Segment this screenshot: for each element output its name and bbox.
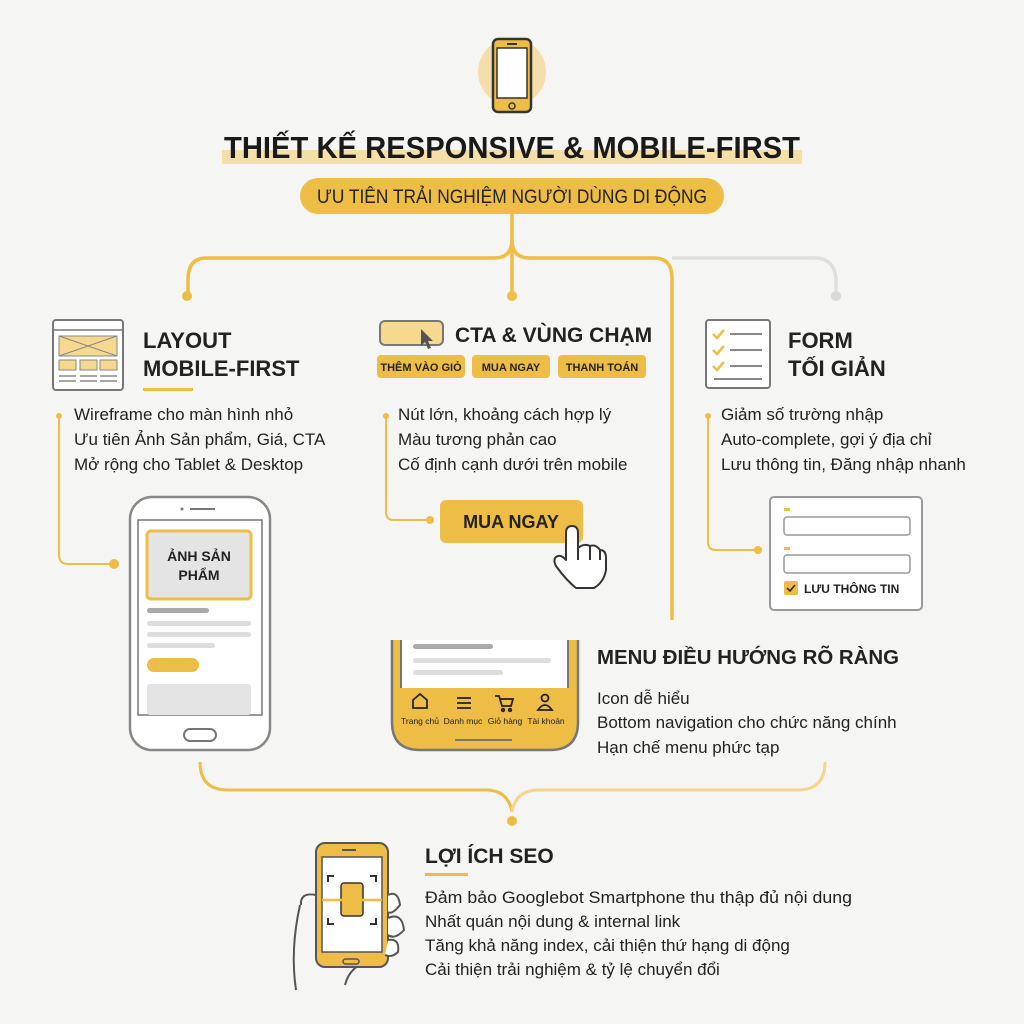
phone wireframe: PHẨM [178, 566, 220, 583]
form mockup: LƯU THÔNG TIN [804, 581, 899, 596]
panel: menu điều hướng: Icon dễ hiểu [597, 689, 690, 708]
bullets [74, 405, 326, 474]
icon: button with cursor [380, 321, 443, 349]
tags [377, 355, 646, 378]
panel: form tối giản: Lưu thông tin, Đăng nhập nhanh [721, 455, 966, 474]
connector tree top [182, 214, 841, 620]
panel: form tối giản [705, 320, 966, 610]
heading: LAYOUT [143, 328, 232, 353]
panel: form tối giản: Auto-complete, gợi ý địa chỉ [721, 430, 932, 449]
panel: layout mobile-first: MOBILE-FIRST [143, 356, 300, 381]
panel: lợi ích SEO: Tăng khả năng index, cải thiện thứ hạng di động [425, 936, 790, 955]
panel: menu điều hướng: Bottom navigation cho chức năng chính [597, 713, 897, 732]
subtitle pill: ƯU TIÊN TRẢI NGHIỆM NGƯỜI DÙNG DI ĐỘNG [317, 186, 707, 208]
phone bottom with nav: Danh mục [444, 716, 483, 726]
phone bottom with nav: Giỏ hàng [488, 716, 523, 726]
panel: lợi ích SEO [294, 843, 852, 990]
panel: menu điều hướng [392, 640, 899, 757]
bullets: Ưu tiên Ảnh Sản phẩm, Giá, CTA [74, 430, 326, 449]
phone wireframe: ẢNH SẢN [167, 548, 231, 564]
form mockup [770, 497, 922, 610]
phone wireframe [130, 497, 270, 750]
panel: CTA & vùng chạm: CTA & VÙNG CHẠM [455, 323, 652, 347]
panel: form tối giản: Giảm số trường nhập [721, 405, 883, 424]
bullets: Wireframe cho màn hình nhỏ [74, 405, 293, 424]
bullets: Nút lớn, khoảng cách hợp lý [398, 405, 612, 424]
icon: hand pointer [554, 526, 606, 588]
subtitle pill [300, 178, 724, 214]
bullets: Cố định cạnh dưới trên mobile [398, 455, 627, 474]
button MUA NGAY [440, 500, 583, 543]
phone bottom with nav: Tài khoản [527, 716, 565, 726]
bullets: Màu tương phản cao [398, 430, 557, 449]
panel: lợi ích SEO: Cải thiện trải nghiệm & tỷ lệ chuyển đổi [425, 960, 720, 979]
phone bottom with nav [392, 640, 578, 750]
panel: lợi ích SEO: Đảm bảo Googlebot Smartphone thu thập đủ nội dung [425, 888, 852, 907]
icon: checklist [706, 320, 770, 388]
icon: top phone [478, 38, 546, 112]
panel: layout mobile-first [53, 320, 326, 750]
panel: lợi ích SEO: Nhất quán nội dung & internal link [425, 912, 681, 931]
panel: menu điều hướng: Hạn chế menu phức tạp [597, 738, 779, 757]
tags: THÊM VÀO GIỎ [380, 361, 462, 374]
panel: menu điều hướng: MENU ĐIỀU HƯỚNG RÕ RÀNG [597, 645, 899, 669]
panel: CTA & vùng chạm [377, 321, 652, 588]
icon: wireframe [53, 320, 123, 390]
title: THIẾT KẾ RESPONSIVE & MOBILE-FIRST [224, 130, 800, 165]
panel: lợi ích SEO: LỢI ÍCH SEO [425, 845, 554, 868]
tags: THANH TOÁN [566, 361, 638, 374]
panel: form tối giản: TỐI GIẢN [788, 355, 886, 381]
icon: hand holding phone [294, 843, 404, 990]
bullets: Mở rộng cho Tablet & Desktop [74, 455, 303, 474]
panel: form tối giản: FORM [788, 328, 853, 353]
connector bottom bracket [200, 762, 825, 826]
button MUA NGAY: MUA NGAY [463, 512, 559, 532]
bullets [398, 405, 627, 474]
tags: MUA NGAY [482, 362, 541, 374]
phone bottom with nav: Trang chủ [401, 716, 439, 726]
